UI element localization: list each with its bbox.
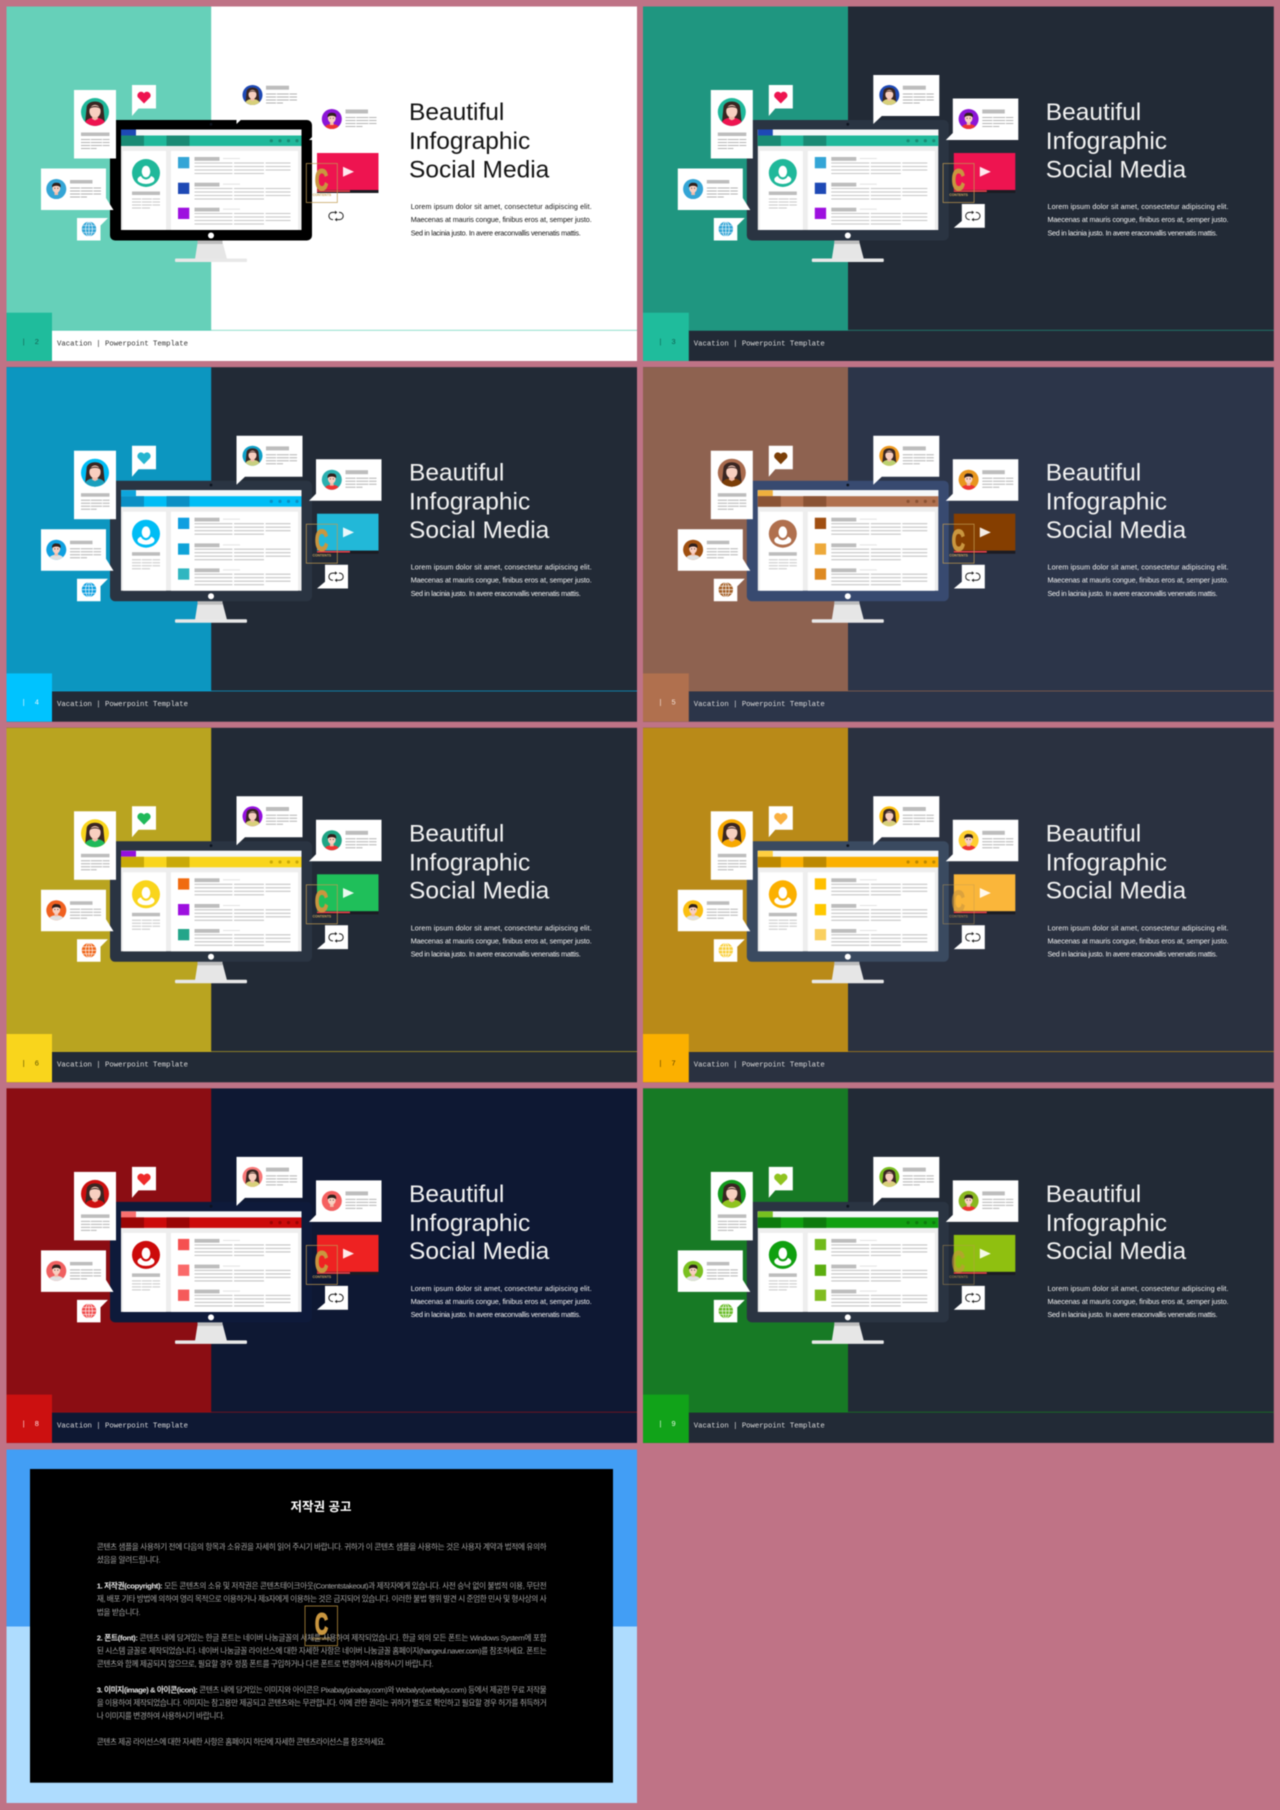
footer text: Vacation | Powerpoint Template [694,340,825,348]
font paragraph [97,1633,547,1668]
background [643,367,1274,722]
watermark: C [315,885,328,918]
globe bubble [77,939,108,962]
body text: Sed in lacinia justo. In avere eraconvallis venenatis mattis. [1048,950,1218,959]
video player [954,153,1015,193]
background [6,728,637,1082]
footer line [689,1411,1274,1413]
top comment bubble [873,796,939,845]
watermark: C [952,525,965,558]
heart bubble [132,806,156,837]
title [409,460,550,544]
background [6,1088,637,1443]
profile card [711,1172,753,1240]
title: Infographic [409,1210,530,1237]
left comment bubble [678,890,750,931]
body text: Lorem ipsum dolor sit amet, consectetur adipiscing elit. [1048,923,1228,932]
intro paragraph: 셨음을 알려드립니다. [97,1555,161,1565]
loop bubble [317,925,348,949]
watermark: CONTENTS [312,914,332,918]
watermark [306,524,337,563]
copyright paragraph [97,1581,547,1617]
right comment bubble [946,459,1018,501]
left comment bubble [678,529,750,571]
left comment bubble [678,168,750,210]
title: Beautiful [1046,820,1141,847]
title [409,99,550,183]
profile card [74,1172,116,1240]
heart bubble [769,446,793,477]
background [643,1088,1274,1443]
title: Infographic [1046,1210,1167,1237]
globe bubble [77,579,108,601]
watermark: C [952,164,965,197]
title: Beautiful [1046,460,1141,487]
heart bubble [769,85,793,116]
footer line [52,690,637,692]
page number block [643,1395,689,1443]
body text: Sed in lacinia justo. In avere eraconvallis venenatis mattis. [1048,228,1218,237]
video player [317,874,378,914]
globe bubble [714,579,745,601]
page number: | 9 [658,1421,676,1429]
title: Infographic [1046,128,1167,155]
watermark: CONTENTS [312,1637,331,1641]
body text [411,923,592,959]
background [6,6,637,361]
title [1046,99,1186,183]
body text: Lorem ipsum dolor sit amet, consectetur adipiscing elit. [411,563,592,572]
watermark: C [315,1246,328,1279]
right comment bubble [946,820,1018,861]
left comment bubble [41,890,114,931]
globe bubble [714,1300,745,1322]
colour block [643,6,848,330]
page number block [6,1034,52,1082]
video player [954,874,1015,914]
panel: slide 9 green [643,1088,1274,1443]
page number block [6,1395,52,1443]
title [409,1181,550,1265]
colour block [643,1088,848,1412]
body text [1048,923,1228,959]
page number block [643,313,689,361]
image and icon paragraph: 3. 이미지(image) & 아이콘(icon): 콘텐츠 내에 담겨있는 이미지와 아이콘은 Pixabay(pixabay.com)와 Webalys(webalys.com) 등에서 제공한 무료 저작물 [97,1685,547,1695]
top comment bubble [236,436,302,485]
profile card [711,811,753,880]
page number: | 6 [22,1060,39,1068]
intro paragraph: 콘텐츠 샘플을 사용하기 전에 다음의 항목과 소유권을 자세히 읽어 주시기 바랍니다. 귀하가 이 콘텐츠 샘플을 사용하는 것은 사용자 계약과 법적에 유의하 [97,1542,547,1552]
body text: Maecenas at mauris congue, finibus eros at, semper justo. [1048,1297,1228,1306]
right comment bubble [309,98,382,140]
top comment bubble [236,75,302,124]
globe bubble [714,939,745,962]
watermark [306,164,337,202]
watermark [943,1245,974,1284]
monitor [747,841,949,983]
video player [317,514,378,554]
monitor [747,1202,949,1344]
body text: Maecenas at mauris congue, finibus eros at, semper justo. [411,936,592,945]
page number block [6,673,52,722]
colour block [643,367,848,691]
loop bubble [954,204,985,228]
monitor [110,1202,312,1344]
font paragraph: 2. 폰트(font): 콘텐츠 내에 담겨있는 한글 폰트는 네이버 나눔글꼴의 서체를 사용하여 제작되었습니다. 한글 외의 모든 폰트는 Windows System에 포함 [97,1633,547,1643]
body text: Maecenas at mauris congue, finibus eros at, semper justo. [1048,576,1228,585]
watermark: C [952,885,965,918]
title: Social Media [409,1238,550,1265]
colour block [6,367,211,691]
page number block [643,673,689,722]
image and icon paragraph: 을 이용하여 제작되었습니다. 이미지는 참고용만 제공되고 콘텐츠와는 무관합니다. 이에 관한 권리는 귀하가 별도로 확인하고 필요할 경우 허가를 취득하거 [97,1698,547,1708]
panel: copyright notice [6,1450,637,1803]
title: Social Media [409,156,550,183]
profile card [711,451,753,519]
watermark [943,885,974,924]
body text: Maecenas at mauris congue, finibus eros at, semper justo. [1048,215,1228,224]
copyright paragraph: 재, 배포 기타 방법에 의하여 영리 목적으로 이용하거나 제3자에게 이용하는 것은 금지되어 있습니다. 이러한 불법 행위 발견 시 준엄한 민사 및 형사상의 사 [97,1593,547,1603]
left comment bubble [678,1250,750,1292]
watermark: C [952,1246,965,1279]
body text: Sed in lacinia justo. In avere eraconvallis venenatis mattis. [1048,1310,1218,1319]
video player [317,153,378,193]
title: Infographic [409,128,530,155]
top comment bubble [236,796,302,845]
title: Beautiful [1046,99,1141,126]
image and icon paragraph [97,1685,547,1721]
body text: Maecenas at mauris congue, finibus eros at, semper justo. [411,576,592,585]
top comment bubble [873,75,939,124]
monitor [110,841,312,983]
font paragraph: 된 시스템 글꼴로 제작되었습니다. 네이버 나눔글꼴 라이선스에 대한 자세한 사항은 네이버 나눔글꼴 홈페이지(hangeul.naver.com)를 참조하세요. 폰트는 [97,1646,547,1656]
footer text: Vacation | Powerpoint Template [57,701,188,709]
title [409,820,550,905]
watermark [943,164,974,202]
globe bubble [77,1300,108,1322]
colour block [6,6,211,330]
heart bubble [132,1167,156,1198]
top comment bubble [236,1157,302,1206]
footer text: Vacation | Powerpoint Template [57,1422,188,1430]
title [1046,1181,1186,1265]
panel: slide 4 blue [6,367,637,722]
top comment bubble [873,436,939,485]
footer line [689,329,1274,331]
footer text: Vacation | Powerpoint Template [694,701,825,709]
body text: Lorem ipsum dolor sit amet, consectetur adipiscing elit. [1048,202,1228,211]
heart bubble [769,1167,793,1198]
left comment bubble [41,168,114,210]
watermark: CONTENTS [949,193,969,197]
font paragraph: 콘텐츠와 함께 제공되지 않으므로, 필요할 경우 정품 폰트를 구입하거나 다른 폰트로 변경하여 사용하시기 바랍니다. [97,1658,434,1668]
watermark [943,524,974,563]
profile card [711,90,753,158]
page number: | 7 [658,1060,676,1068]
watermark [305,1606,338,1646]
loop bubble [954,565,985,588]
left comment bubble [41,529,114,571]
title: Social Media [409,878,550,905]
copyright paragraph: 1. 저작권(copyright): 모든 콘텐츠의 소유 및 저작권은 콘텐츠테이크아웃(Contentstakeout)과 제작자에게 있습니다. 사전 승낙 없이 불법적 이용, 무단전 [97,1581,547,1591]
profile card [74,90,116,158]
watermark: C [315,1608,328,1641]
panel: slide 6 olive yellow [6,728,637,1082]
title [1046,820,1186,905]
loop bubble [954,925,985,949]
title: Social Media [1046,517,1186,544]
panel: slide 5 brown [643,367,1274,722]
right comment bubble [309,820,382,861]
title: Infographic [1046,849,1167,876]
colour block [6,1088,211,1412]
watermark: CONTENTS [949,554,969,558]
footer line [52,329,637,331]
monitor [110,481,312,623]
title: Social Media [1046,156,1186,183]
loop bubble [954,1286,985,1310]
page number: | 3 [658,339,676,347]
monitor [747,481,949,623]
title: Social Media [1046,1238,1186,1265]
watermark: CONTENTS [312,1275,332,1279]
body text: Sed in lacinia justo. In avere eraconvallis venenatis mattis. [1048,589,1218,598]
footer text: Vacation | Powerpoint Template [57,340,188,348]
intro paragraph [97,1542,547,1565]
panel: slide 7 amber [643,728,1274,1082]
black notice box [30,1469,613,1783]
body text: Maecenas at mauris congue, finibus eros at, semper justo. [411,215,592,224]
body text: Lorem ipsum dolor sit amet, consectetur adipiscing elit. [1048,1284,1228,1293]
watermark: C [315,164,328,197]
title: Beautiful [409,1181,504,1208]
heart bubble [769,806,793,837]
colour block [6,728,211,1052]
title: Social Media [1046,878,1186,905]
right comment bubble [309,459,382,501]
globe bubble [714,218,745,240]
watermark [306,885,337,924]
body text [411,202,592,237]
watermark: C [315,525,328,558]
colour block [643,728,848,1052]
body text: Sed in lacinia justo. In avere eraconvallis venenatis mattis. [411,589,581,598]
background [643,728,1274,1082]
closing line: 콘텐츠 제공 라이선스에 대한 자세한 사항은 홈페이지 하단에 자세한 콘텐츠라이선스를 참조하세요. [97,1737,386,1747]
title: Beautiful [1046,1181,1141,1208]
title: Infographic [409,489,530,516]
page number block [643,1034,689,1082]
body text: Sed in lacinia justo. In avere eraconvallis venenatis mattis. [411,228,581,237]
page number: | 4 [22,700,40,708]
video player [954,514,1015,554]
body text: Lorem ipsum dolor sit amet, consectetur adipiscing elit. [411,1284,592,1293]
monitor [110,120,312,262]
footer line [689,1051,1274,1053]
video player [317,1235,378,1275]
page number: | 5 [658,700,676,708]
page number: | 8 [22,1421,39,1429]
right comment bubble [946,98,1018,140]
title: Beautiful [409,460,504,487]
watermark: CONTENTS [949,914,969,918]
copyright paragraph: 법을 받습니다. [97,1607,141,1617]
title: Infographic [1046,489,1167,516]
body text [411,563,592,598]
panel: slide 8 red [6,1088,637,1443]
footer text: Vacation | Powerpoint Template [694,1062,825,1070]
globe bubble [77,218,108,240]
body text: Lorem ipsum dolor sit amet, consectetur adipiscing elit. [411,923,592,932]
page number: | 2 [22,339,39,347]
background lower light blue [6,1626,637,1803]
footer text: Vacation | Powerpoint Template [694,1422,825,1430]
background [6,367,637,722]
title: Infographic [409,849,530,876]
notice heading: 저작권 공고 [291,1499,351,1514]
background [643,6,1274,361]
title: Beautiful [409,99,504,126]
watermark: CONTENTS [949,1275,969,1279]
profile card [74,811,116,880]
footer line [52,1411,637,1413]
profile card [74,451,116,519]
title: Beautiful [409,820,504,847]
image and icon paragraph: 나 이미지를 변경하여 사용하시기 바랍니다. [97,1711,225,1721]
body text: Lorem ipsum dolor sit amet, consectetur adipiscing elit. [411,202,592,211]
body text: Maecenas at mauris congue, finibus eros at, semper justo. [411,1297,592,1306]
body text [1048,563,1228,598]
left comment bubble [41,1250,114,1292]
title [1046,460,1186,544]
body text: Sed in lacinia justo. In avere eraconvallis venenatis mattis. [411,950,581,959]
panel: slide 2 mint on white [6,6,637,361]
footer line [689,690,1274,692]
footer text: Vacation | Powerpoint Template [57,1062,188,1070]
page number block [6,313,52,361]
footer line [52,1051,637,1053]
body text: Maecenas at mauris congue, finibus eros at, semper justo. [1048,936,1228,945]
right comment bubble [946,1180,1018,1222]
panel: slide 3 teal on dark [643,6,1274,361]
watermark [306,1245,337,1284]
loop bubble [317,1286,348,1310]
background upper blue [6,1450,637,1626]
body text [1048,1284,1228,1319]
heart bubble [132,85,156,116]
watermark: CONTENTS [312,554,332,558]
monitor [747,120,949,262]
body text [1048,202,1228,237]
video player [954,1235,1015,1275]
right comment bubble [309,1180,382,1222]
body text: Sed in lacinia justo. In avere eraconvallis venenatis mattis. [411,1310,581,1319]
loop bubble [317,565,348,588]
body text: Lorem ipsum dolor sit amet, consectetur adipiscing elit. [1048,563,1228,572]
loop bubble [317,204,348,228]
body text [411,1284,592,1319]
top comment bubble [873,1157,939,1206]
heart bubble [132,446,156,477]
title: Social Media [409,517,550,544]
watermark: CONTENTS [312,193,332,197]
